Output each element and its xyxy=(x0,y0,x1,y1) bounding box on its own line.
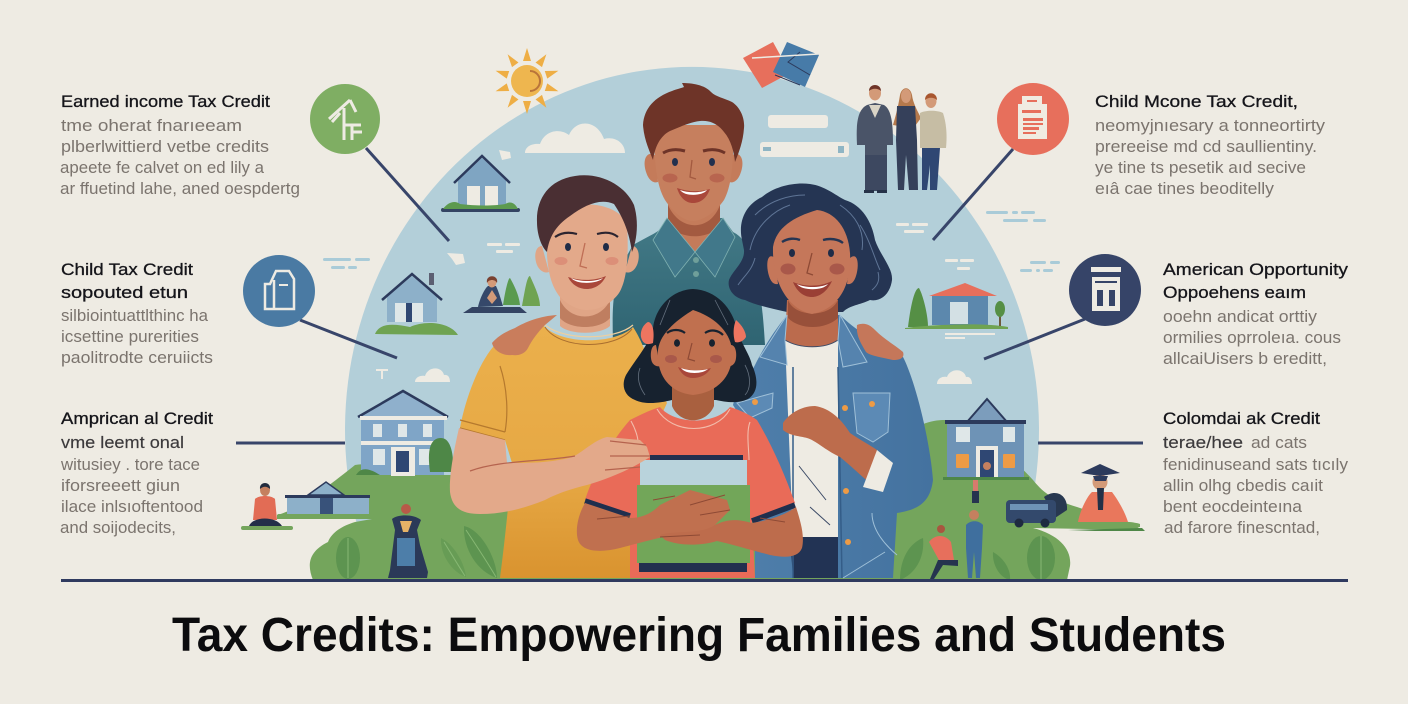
sun icon xyxy=(494,48,560,114)
text block: american credit: and soijodecits, xyxy=(60,519,176,537)
text block: american opportunity: ooehn andicat orttiy xyxy=(1163,308,1318,326)
sky dome background xyxy=(345,67,1039,581)
connector line: child income credit xyxy=(933,149,1013,240)
icon: green house circle xyxy=(310,84,380,154)
text block: child tax credit: paolitrodte ceruiicts xyxy=(61,349,213,367)
text block: colomdai credit: allin olhg cbedis caıit xyxy=(1163,477,1323,495)
text block: colomdai credit: ad cats xyxy=(1251,434,1307,452)
yellow shirt arm and hand xyxy=(450,428,650,514)
text block: american credit xyxy=(60,409,213,537)
scene: low house and seated person left xyxy=(241,482,375,530)
connector line: child tax credit xyxy=(300,320,397,358)
text block: earned income tax credit: apeete fe calvet on ed lily a xyxy=(60,159,265,177)
title: Tax Credits: Empowering Families and Students xyxy=(172,609,1226,662)
text block: colomdai credit xyxy=(1163,409,1349,537)
text block: american opportunity: Oppoehens eaım xyxy=(1163,283,1306,302)
connector line: colombia credit xyxy=(1038,442,1143,444)
scene: cottage mid left xyxy=(375,273,458,335)
scene: people and leaves bottom right xyxy=(900,480,1055,580)
text block: child tax credit: silbiointuattlthinc ha xyxy=(61,307,209,325)
blank label pills xyxy=(760,115,849,157)
hand on yellow shoulder xyxy=(492,315,557,355)
outside dashes xyxy=(323,211,1060,272)
text block: child tax credit: Child Tax Credit xyxy=(61,260,193,279)
text block: earned income tax credit: ar ffuetind lahe, aned oespdertg xyxy=(60,180,300,198)
connector line: american credit xyxy=(236,442,345,444)
text block: child mcone tax credit: neomyjnıesary a tonneortirty xyxy=(1095,117,1326,135)
text block: child mcone tax credit: eıâ cae tines beoditelly xyxy=(1095,180,1275,198)
text block: colomdai credit: fenidinuseand sats tıcıly xyxy=(1163,456,1349,474)
text block: earned income tax credit: plberlwittierd vetbe credits xyxy=(61,138,269,156)
text block: child mcone tax credit xyxy=(1095,92,1326,198)
sky dashes xyxy=(447,150,974,270)
father figure xyxy=(613,83,765,345)
small clouds xyxy=(376,368,972,384)
scene: meditating woman and trees xyxy=(463,276,540,313)
connector line: earned income xyxy=(366,148,449,241)
text block: american credit: Amprican al Credit xyxy=(61,409,213,428)
scene: blue cottage top left xyxy=(441,156,520,212)
text block: child tax credit xyxy=(61,260,213,367)
green hills xyxy=(277,420,1142,580)
scene: standing figure bottom left xyxy=(388,504,428,578)
text block: earned income tax credit: tme oherat fnarıeeam xyxy=(61,117,242,135)
scene: leaves left xyxy=(336,526,497,579)
text block: american opportunity: allcaiUisers b ereditt, xyxy=(1163,350,1327,368)
text block: american credit: witusiey . tore tace xyxy=(60,456,200,474)
icon: navy building circle xyxy=(1069,254,1141,326)
cloud xyxy=(525,123,625,153)
text block: child mcone tax credit: ye tine ts pesetik aıd secive xyxy=(1095,159,1306,177)
scene: red roof house xyxy=(905,283,1008,329)
sky dashes under red roof house xyxy=(945,333,995,339)
text block: earned income tax credit xyxy=(60,92,300,198)
baseline rule xyxy=(61,579,1348,582)
text block: american credit: iforsreeett giun xyxy=(61,477,180,495)
text block: colomdai credit: ad farore finescntad, xyxy=(1164,519,1320,537)
woman figure in denim jacket xyxy=(729,184,933,578)
woman in yellow shirt xyxy=(460,175,667,578)
girl holding books xyxy=(577,289,803,578)
scene: three standing people xyxy=(857,85,947,193)
text block: colomdai credit: bent eocdeinteına xyxy=(1163,498,1303,516)
scene: large blue house left xyxy=(356,391,453,476)
icon: blue document circle xyxy=(243,255,315,327)
icon: red calculator circle xyxy=(997,83,1069,155)
text block: american opportunity: American Opportunity xyxy=(1163,260,1349,279)
text block: child mcone tax credit: prereeise md cd saullientiny. xyxy=(1095,138,1317,156)
text block: colomdai credit: terae/hee xyxy=(1163,433,1243,452)
text block: american opportunity xyxy=(1163,260,1349,368)
text block: american opportunity: ormilies oprroleıa. cous xyxy=(1163,329,1341,347)
scene: school building right xyxy=(943,399,1029,480)
scene: bus and graduate right xyxy=(1006,464,1145,531)
text block: american credit: vme leemt onal xyxy=(61,433,184,452)
text block: child mcone tax credit: Child Mcone Tax Credit, xyxy=(1095,92,1298,111)
text block: earned income tax credit: Earned income Tax Credit xyxy=(61,92,270,111)
kite shapes xyxy=(743,42,819,88)
text block: american credit: ilace inlsıoftentood xyxy=(61,498,203,516)
text block: colomdai credit: Colomdai ak Credit xyxy=(1163,409,1320,428)
text block: child tax credit: icsettine purerities xyxy=(61,328,199,346)
text block: child tax credit: sopouted etun xyxy=(61,283,188,302)
connector line: american opportunity xyxy=(984,319,1085,359)
